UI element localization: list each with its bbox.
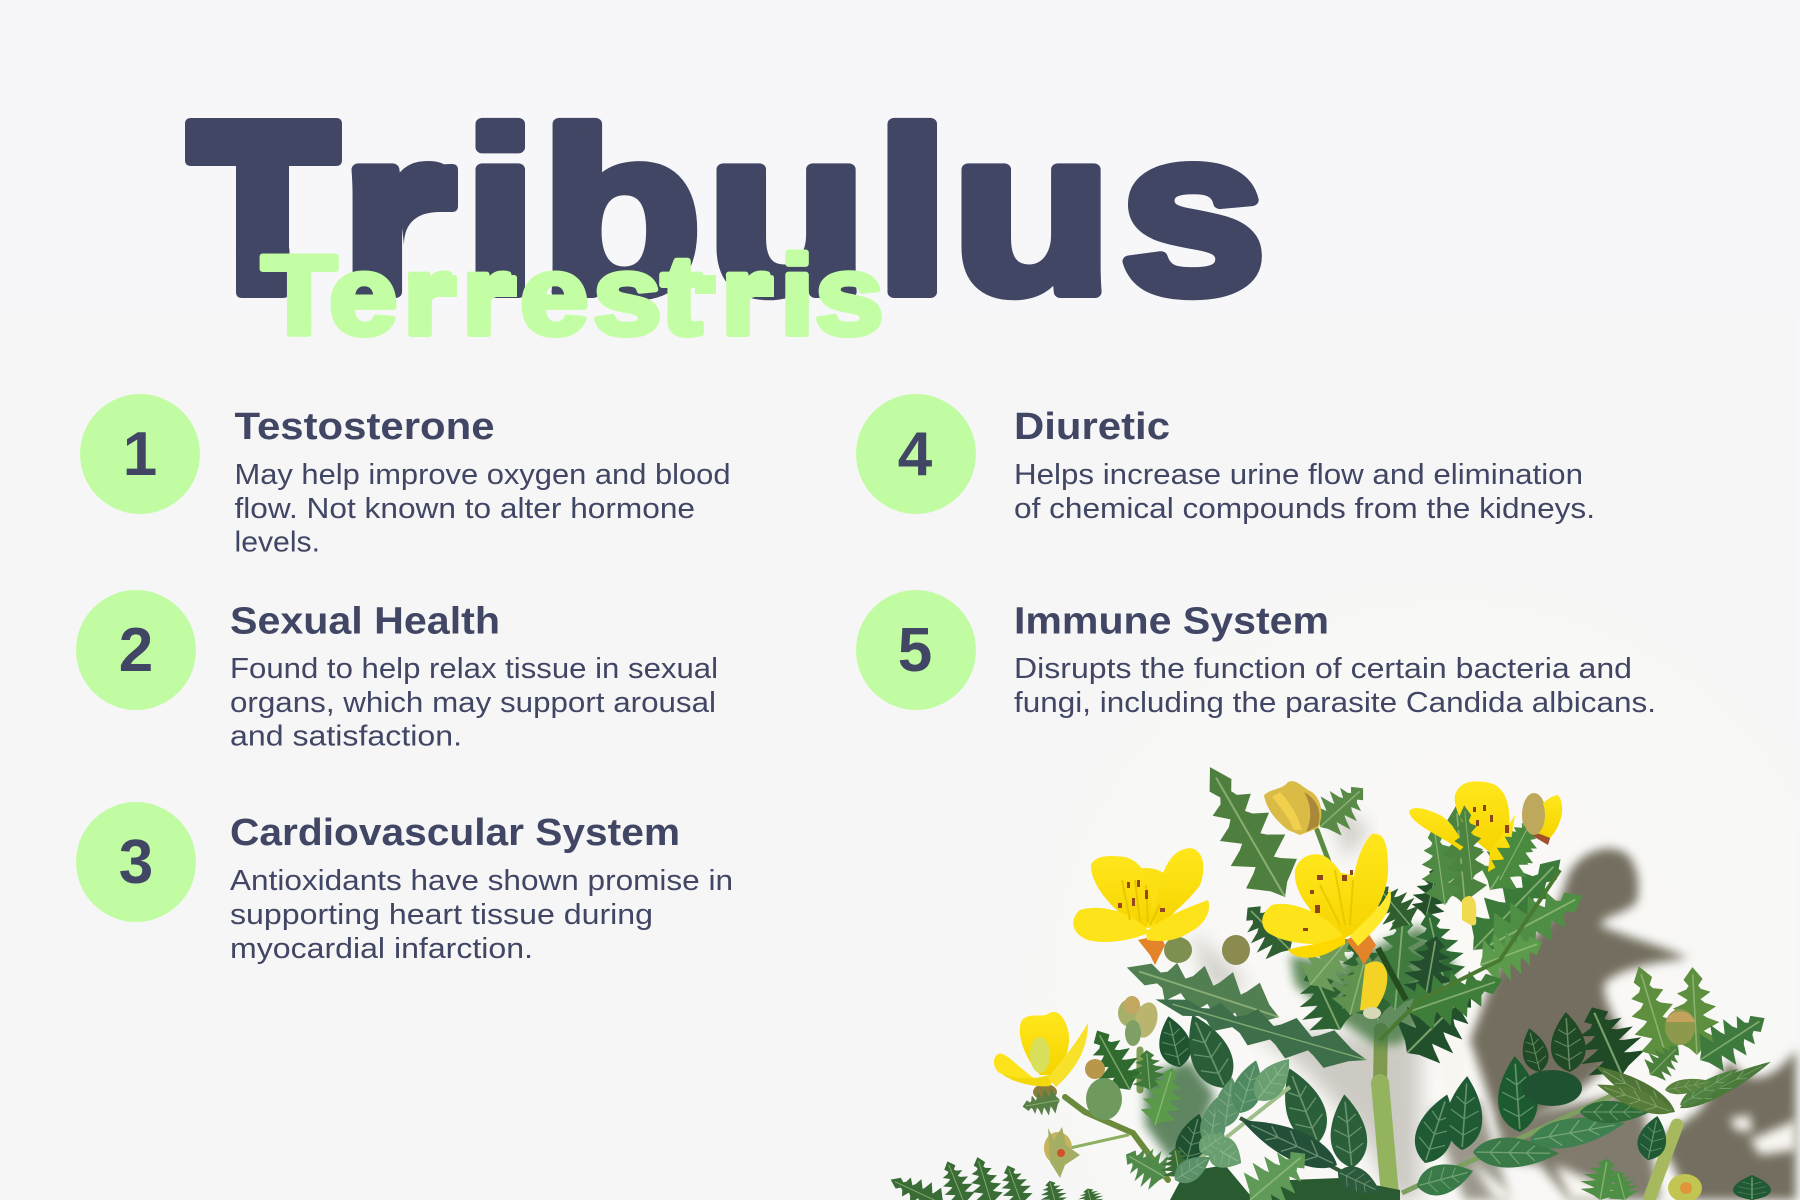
description: immune system: Disrupts the function of certain bacteria and [1014,653,1632,685]
description: cardiovascular system [230,865,733,965]
description: sexual health [230,653,718,752]
mid fern mass [1230,862,1494,1076]
number badge 4: 4 [898,420,933,489]
description: testosterone [234,459,730,558]
heading: testosterone: Testosterone [234,406,494,448]
number badge 2: 2 [119,616,153,685]
description: immune system [1014,653,1656,719]
highlights in shadow [1440,1045,1796,1200]
item 3: cardiovascular system [76,802,733,965]
heading: cardiovascular system: Cardiovascular System [230,812,680,854]
description: cardiovascular system: myocardial infarction. [230,933,533,965]
description: testosterone: levels. [234,526,320,558]
dark leaf with rachis [1233,1107,1385,1200]
dense green backdrop [1145,925,1455,1200]
flower: upper right [1409,781,1562,925]
plant shadow [1190,800,1796,1200]
lower-left ferns [1077,940,1373,1195]
description: diuretic: Helps increase urine flow and elimination [1014,459,1583,491]
description: sexual health: and satisfaction. [230,720,462,752]
heading: diuretic: Diuretic [1014,406,1170,448]
subtitle word: Terrestris: Terrestris [261,232,884,358]
flower: upper left [1073,848,1250,965]
title word: Tribulus: Tribulus [242,83,1266,342]
description: diuretic: of chemical compounds from the kidneys. [1014,493,1595,525]
number badge 3 [76,802,196,922]
description: immune system: fungi, including the parasite Candida albicans. [1014,687,1656,719]
stems [1065,830,1677,1197]
description: testosterone: flow. Not known to alter hormone [234,493,695,525]
gray-green compound leaf [1169,1050,1300,1189]
description: testosterone: May help improve oxygen and blood [234,459,730,491]
bottom-left fern row [884,1153,1105,1200]
number badge 5: 5 [898,616,932,685]
item 1: testosterone [80,394,730,558]
ferns over upper right flower [1449,795,1551,888]
flower: lower left [994,1012,1088,1120]
buds [1044,781,1552,1178]
upper ferns [1183,751,1596,1040]
item 2: sexual health [76,590,718,752]
description: cardiovascular system: Antioxidants have shown promise in [230,865,733,897]
heading: immune system: Immune System [1014,600,1329,642]
number badge 1 [80,394,200,514]
number badge 4 [856,394,976,514]
title [185,83,1266,358]
number badge 1: 1 [123,420,157,489]
dark back leaves [1153,994,1771,1200]
description: cardiovascular system: supporting heart tissue during [230,899,653,931]
item 5: immune system [856,590,1656,719]
number badge 5 [856,590,976,710]
item 4: diuretic [856,394,1595,525]
photo: flowering tribulus plant [884,751,1796,1200]
description: sexual health: organs, which may support arousal [230,687,716,719]
paper photo backdrop [0,316,1796,1200]
number badge 2 [76,590,196,710]
number badge 3: 3 [119,828,153,897]
flower: center [1262,834,1391,965]
description: sexual health: Found to help relax tissue in sexual [230,653,718,685]
heading: sexual health: Sexual Health [230,600,500,642]
description: diuretic [1014,459,1595,525]
right compound leaf [1402,1095,1650,1200]
right sprig [1590,959,1778,1200]
